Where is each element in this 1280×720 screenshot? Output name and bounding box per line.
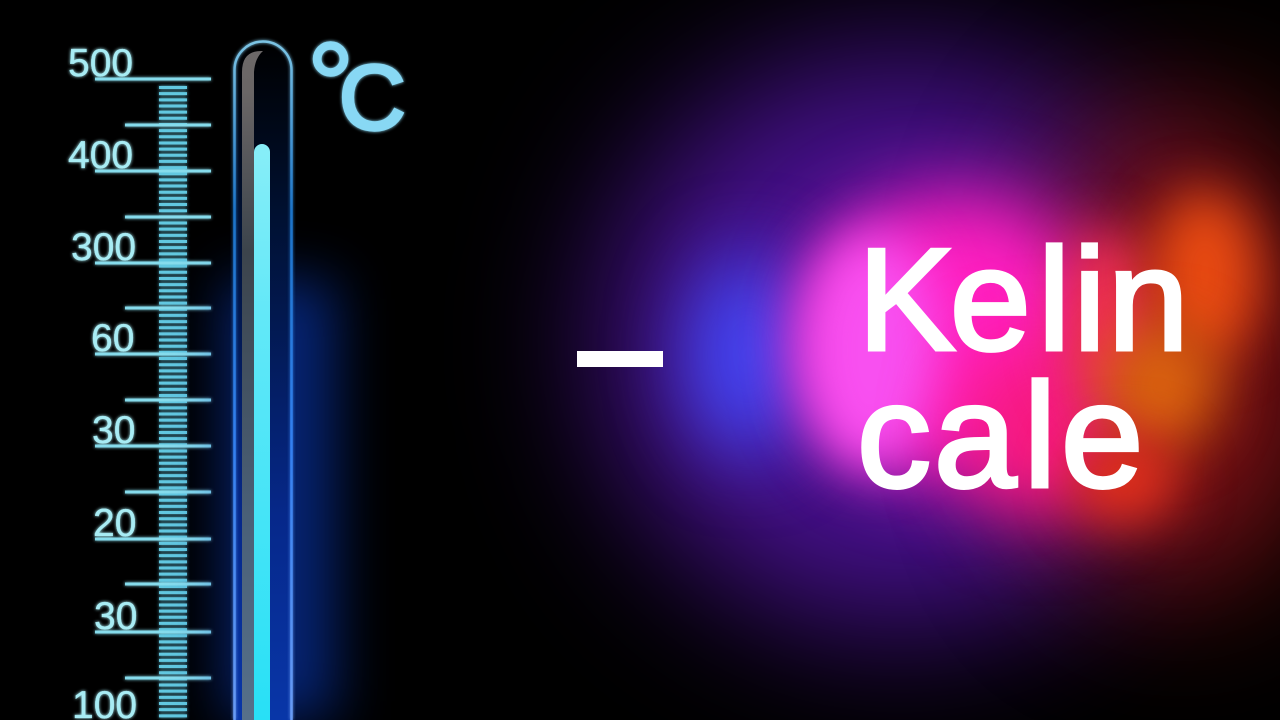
degree sign and letter C: C <box>339 47 405 149</box>
scale tick lines <box>95 79 211 720</box>
glass outline <box>234 41 292 720</box>
glass highlight <box>242 51 263 720</box>
scale numbers: 400 <box>68 134 133 177</box>
word: Kelin: Kelin <box>858 218 1189 380</box>
degrees Celsius unit <box>307 19 405 151</box>
Kelvin scale heading <box>857 218 1189 518</box>
glowing colour cloud background <box>600 50 1280 630</box>
scale numbers: 60 <box>91 317 134 360</box>
scale numbers: 30 <box>94 595 137 638</box>
thermometer tube glow <box>225 280 335 720</box>
scale numbers <box>68 42 137 720</box>
scale numbers: 20 <box>93 502 136 545</box>
scale numbers: 500 <box>68 42 133 85</box>
scale numbers: 30 <box>92 409 135 452</box>
degree sign and letter C: ° <box>307 19 354 151</box>
scale numbers: 300 <box>71 226 136 269</box>
thermometer tube <box>234 41 292 720</box>
word: cale: cale <box>857 354 1143 518</box>
mercury column <box>254 144 270 720</box>
tube interior <box>235 42 291 720</box>
dash symbol <box>577 351 663 367</box>
thermometer scale <box>68 42 211 720</box>
